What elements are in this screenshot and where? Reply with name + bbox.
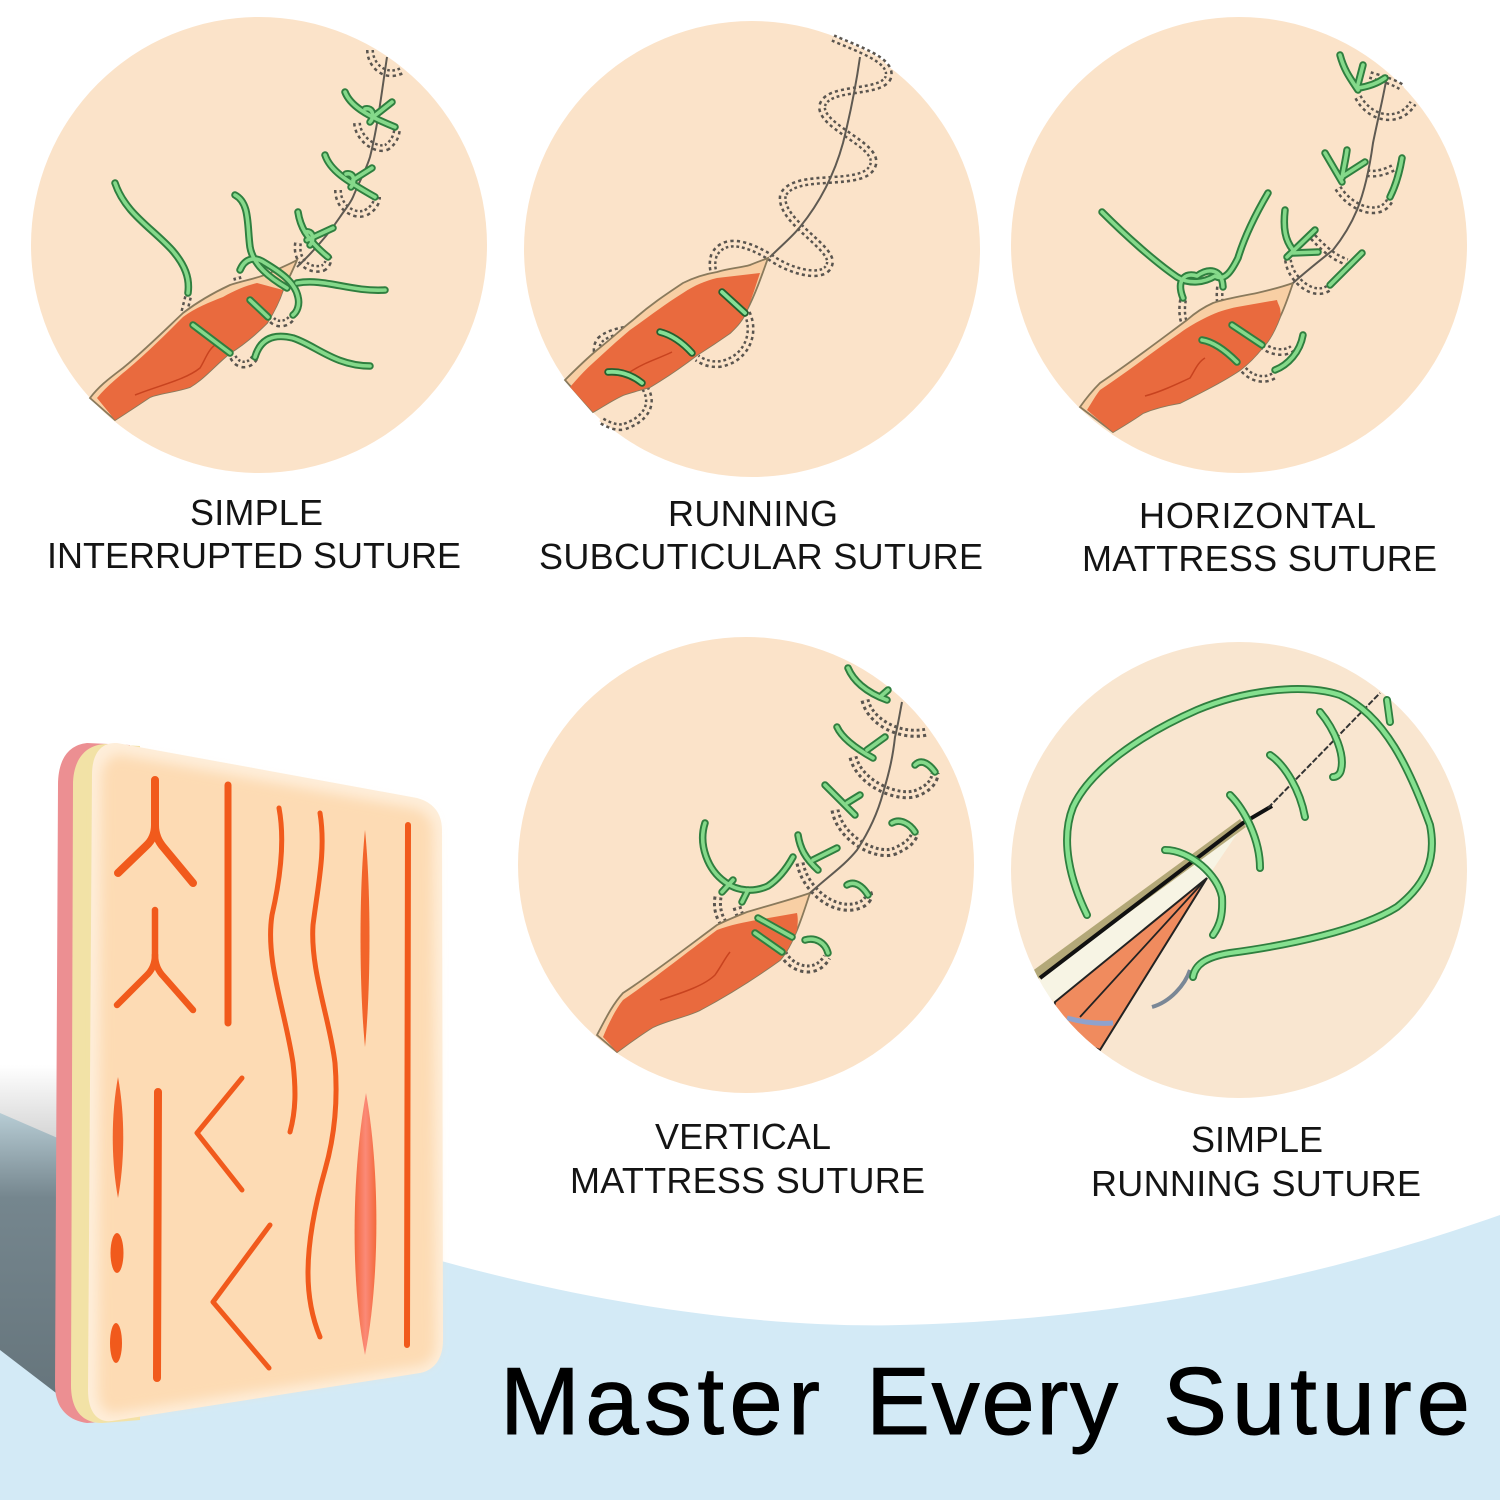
caption: simple interrupted suture: SIMPLE bbox=[190, 492, 323, 533]
suture practice pad bbox=[55, 743, 443, 1423]
pad yellow layer bbox=[71, 744, 140, 1423]
thread line bbox=[1293, 75, 1387, 283]
dotted subcutaneous wave bbox=[597, 38, 889, 427]
dotted subcutaneous loops bbox=[184, 50, 403, 364]
incisions bbox=[110, 780, 408, 1378]
thread line bbox=[297, 57, 387, 267]
caption: simple running suture bbox=[1091, 1119, 1421, 1204]
wound bbox=[90, 260, 297, 420]
wound bbox=[565, 258, 768, 412]
caption: simple interrupted suture bbox=[47, 492, 461, 576]
pad top surface bbox=[88, 743, 443, 1421]
caption: running subcuticular suture: SUBCUTICULAR SUTURE bbox=[539, 536, 983, 577]
circle: vertical mattress suture bbox=[518, 637, 974, 1093]
caption: vertical mattress suture: VERTICAL bbox=[655, 1116, 831, 1157]
caption: horizontal mattress suture: HORIZONTAL bbox=[1139, 495, 1376, 536]
wound bbox=[597, 893, 810, 1052]
green threads bbox=[608, 292, 745, 383]
circle: running subcuticular suture bbox=[524, 21, 980, 477]
green threads bbox=[115, 92, 395, 366]
title: Suture bbox=[1163, 1348, 1470, 1455]
caption: simple interrupted suture: INTERRUPTED SUTURE bbox=[47, 535, 461, 576]
caption: running subcuticular suture bbox=[539, 493, 983, 577]
thread line bbox=[770, 57, 860, 257]
thread tail bbox=[1152, 970, 1190, 1007]
pad pink layer bbox=[55, 743, 130, 1423]
circle: simple interrupted suture bbox=[31, 17, 487, 473]
caption: simple running suture: SIMPLE bbox=[1191, 1119, 1323, 1160]
caption: vertical mattress suture: MATTRESS SUTURE bbox=[570, 1160, 925, 1201]
background: blue wave bbox=[0, 1110, 1500, 1500]
green threads bbox=[703, 668, 935, 953]
pad shadow bbox=[0, 1065, 60, 1396]
green threads bbox=[1067, 689, 1432, 977]
wound wedge bbox=[1034, 806, 1272, 1050]
caption: vertical mattress suture bbox=[570, 1116, 925, 1201]
caption: running subcuticular suture: RUNNING bbox=[668, 493, 838, 534]
circle: horizontal mattress suture bbox=[1011, 17, 1467, 473]
title: Every bbox=[866, 1348, 1118, 1455]
thread line bbox=[810, 702, 902, 893]
dotted subcutaneous loops bbox=[717, 700, 935, 969]
circle: simple running suture bbox=[1011, 642, 1467, 1098]
dotted subcutaneous loops bbox=[1182, 75, 1413, 379]
caption: simple running suture: RUNNING SUTURE bbox=[1091, 1163, 1421, 1204]
dashed running thread bbox=[1268, 693, 1380, 808]
caption: horizontal mattress suture bbox=[1082, 495, 1437, 579]
caption: horizontal mattress suture: MATTRESS SUTURE bbox=[1082, 538, 1437, 579]
title: Master bbox=[500, 1348, 820, 1455]
green threads bbox=[1102, 55, 1402, 370]
wound bbox=[1080, 283, 1293, 432]
